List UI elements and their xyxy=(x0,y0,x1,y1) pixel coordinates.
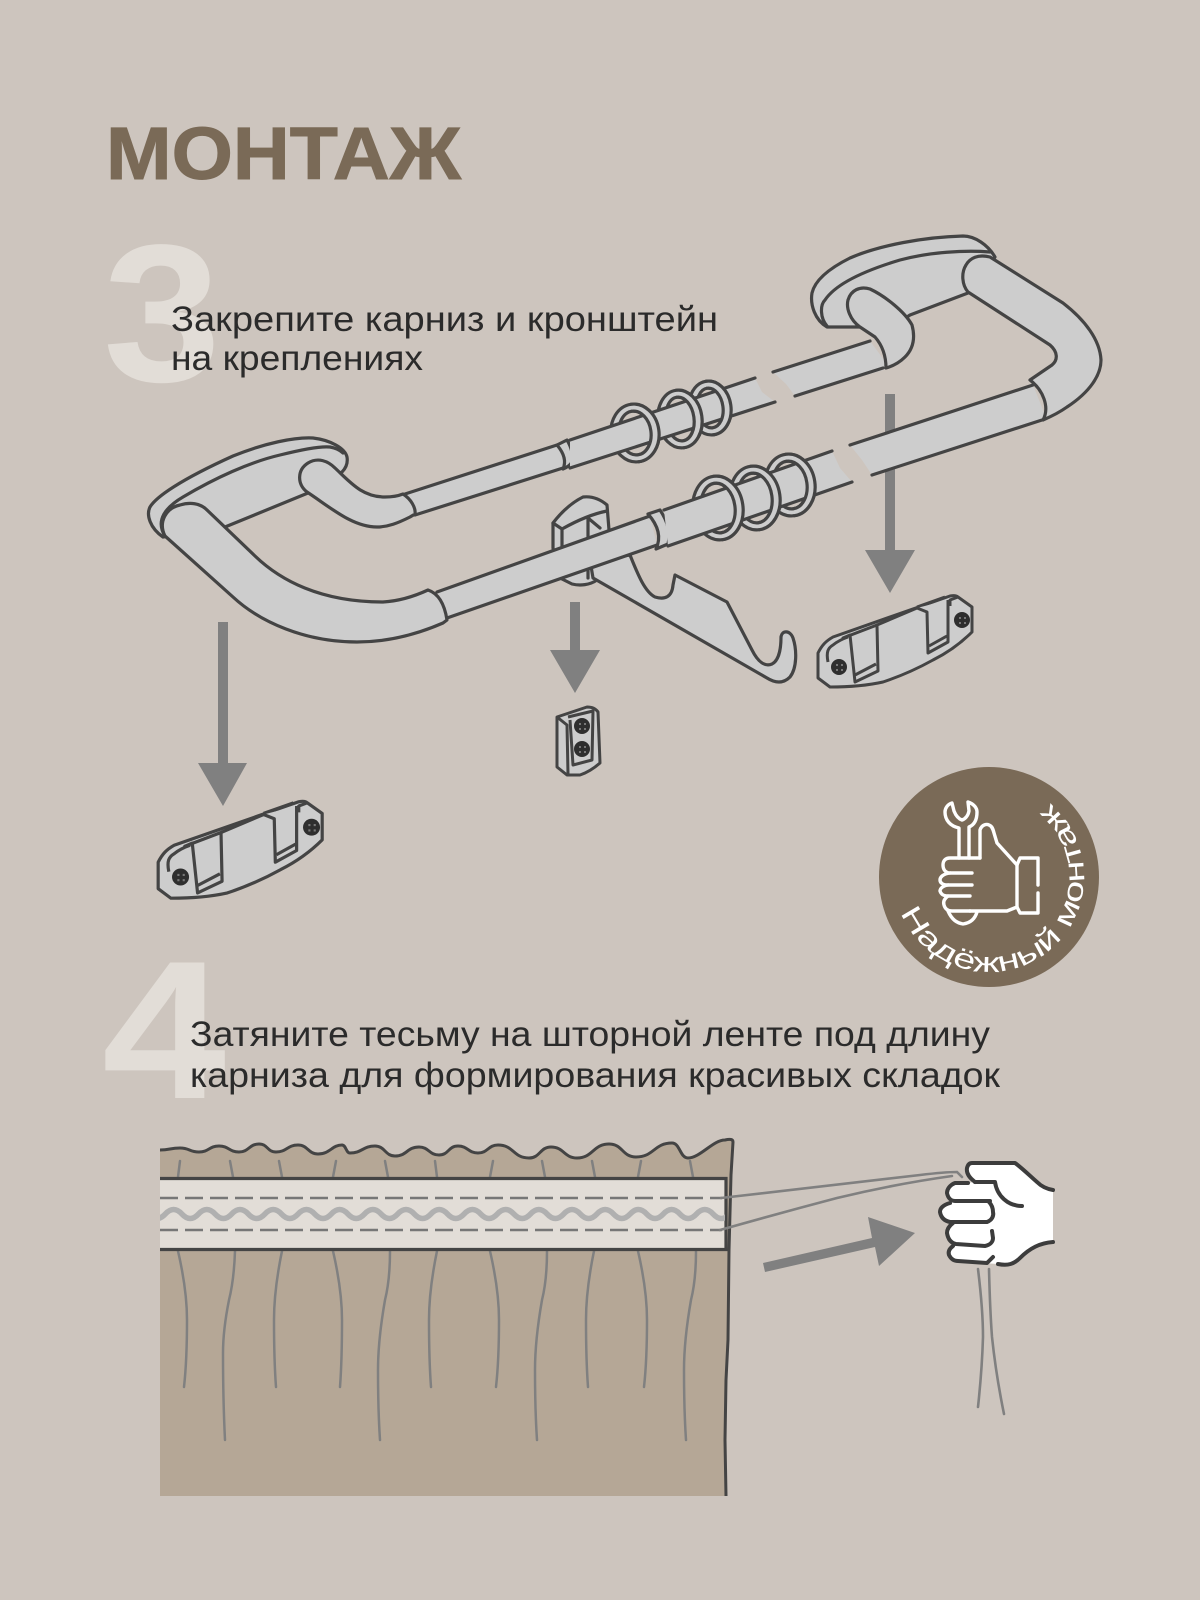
left front arm xyxy=(162,503,447,642)
step 3 text xyxy=(171,300,718,378)
rod segments xyxy=(437,516,657,618)
step 3 text: Закрепите карниз и кронштейн xyxy=(171,300,718,339)
right wall mount xyxy=(818,596,972,687)
screws xyxy=(831,612,970,675)
step 3 text: на креплениях xyxy=(171,339,424,378)
curtain tape band xyxy=(160,1178,726,1250)
screws xyxy=(172,819,320,885)
step number 4: 4 xyxy=(102,920,226,1140)
tape stitching xyxy=(160,1198,722,1230)
left wall mount xyxy=(158,801,322,898)
rings front xyxy=(631,378,735,462)
center wall mount xyxy=(557,707,600,775)
center bracket with hook xyxy=(553,497,796,682)
step 4 text: карниза для формирования красивых складок xyxy=(190,1056,1001,1095)
curtain top edge xyxy=(160,1139,733,1496)
rod segments xyxy=(405,441,573,515)
curtain rod illustration xyxy=(149,236,1101,682)
left back arm xyxy=(300,460,415,527)
left bracket plate xyxy=(149,438,347,537)
step number 3: 3 xyxy=(103,204,221,423)
curtain fabric xyxy=(160,1140,733,1496)
icon: thumbs up with wrench xyxy=(940,802,1038,924)
rings back xyxy=(607,378,735,465)
right bracket plate xyxy=(812,236,995,335)
arrow: pull direction xyxy=(763,1217,915,1272)
pull cords to hand xyxy=(720,1172,962,1230)
rings back xyxy=(689,451,819,543)
curtain illustration xyxy=(149,1139,733,1496)
icon: fist pulling cords xyxy=(940,1163,1053,1265)
screws xyxy=(574,718,590,757)
title: МОНТАЖ xyxy=(106,112,462,195)
lower rod with rings xyxy=(437,385,1047,618)
arrow: left mount xyxy=(198,622,247,806)
badge curved text xyxy=(901,802,1084,972)
step 4 text xyxy=(190,1015,1001,1095)
arrow: center mount xyxy=(550,602,600,693)
arrow: right mount xyxy=(865,394,915,593)
badge xyxy=(879,767,1099,987)
badge circle xyxy=(879,767,1099,987)
right front arm xyxy=(963,256,1101,420)
step 4 text: Затяните тесьму на шторной ленте под длину xyxy=(190,1015,991,1054)
upper rod with rings xyxy=(405,341,890,515)
right back arm xyxy=(848,288,914,368)
rings front xyxy=(714,451,819,540)
cords hanging from hand xyxy=(978,1269,1004,1414)
tape wavy cord xyxy=(149,1210,730,1218)
tape outline xyxy=(160,1178,726,1250)
badge: Надёжный монтаж xyxy=(902,803,1084,972)
pleats xyxy=(178,1161,696,1440)
